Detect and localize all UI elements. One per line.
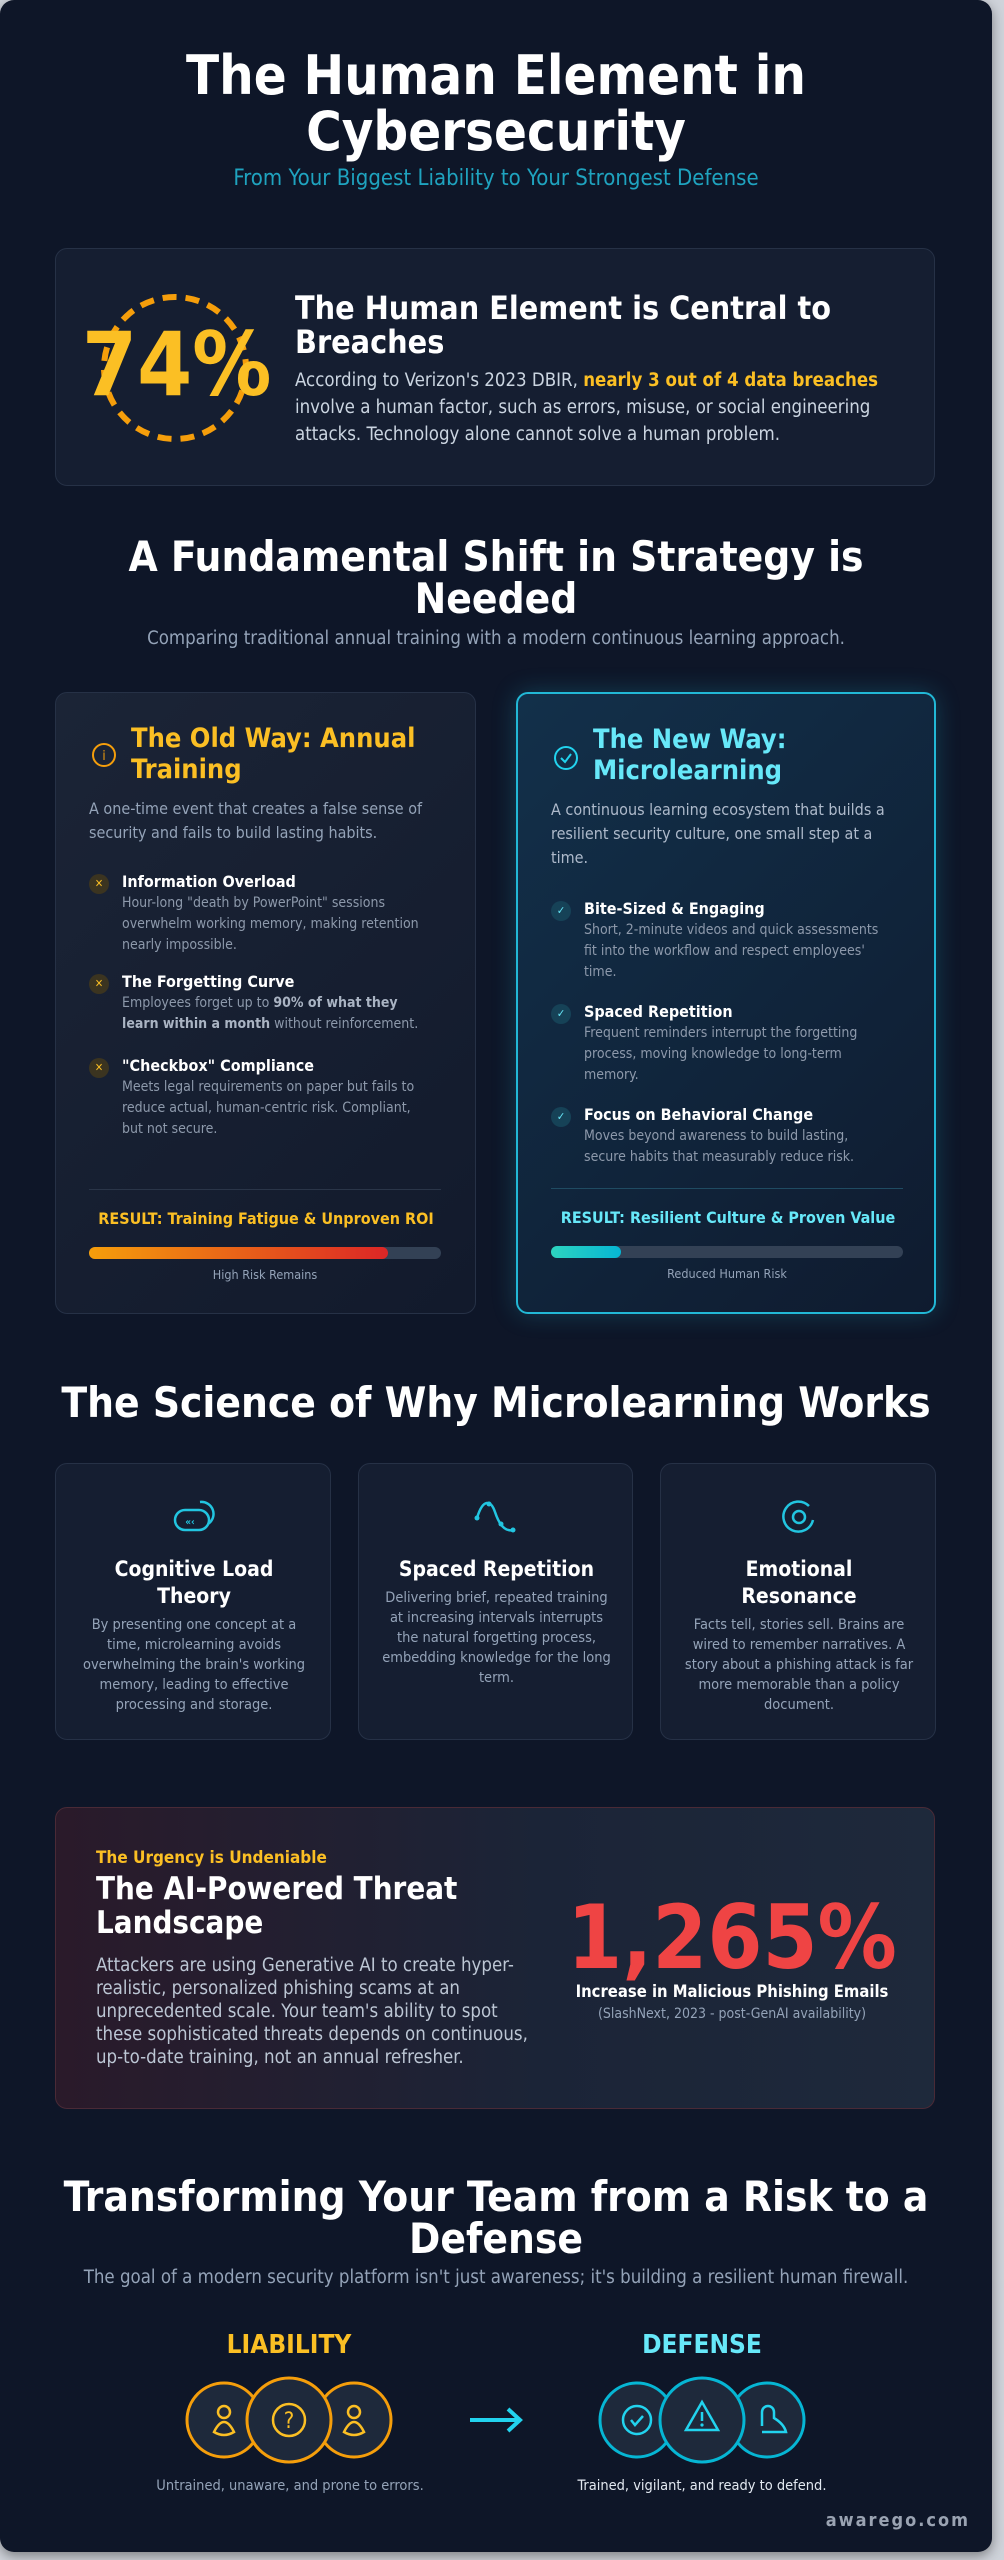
- heading: old way: The Old Way: Annual Training: [131, 723, 415, 785]
- card title: Theory: [157, 1584, 231, 1608]
- item: behavioral change: Focus on Behavioral Change: [584, 1105, 813, 1124]
- item: bite-sized: [551, 899, 878, 980]
- arrow: [470, 2408, 523, 2432]
- section heading: transforming: Transforming Your Team from a Risk to a Defense: [64, 2172, 928, 2263]
- item: forgetting curve: Employees forget up to 90% of what they learn within a month without reinforcement.: [122, 995, 418, 1032]
- item: spaced repetition: Frequent reminders interrupt the forgetting process, moving knowledge to long-term memory.: [584, 1025, 857, 1083]
- card text: Delivering brief, repeated training at increasing intervals interrupts the natural forgetting process, embedding knowledge for the long term.: [382, 1590, 611, 1686]
- item: forgetting curve: [89, 972, 418, 1032]
- bar caption: Reduced Human Risk: [667, 1266, 787, 1281]
- card title: [741, 1557, 857, 1608]
- section heading: science: The Science of Why Microlearning Works: [61, 1378, 931, 1427]
- panel: 74% stat: [55, 248, 935, 486]
- item: checkbox compliance: Meets legal requirements on paper but fails to reduce actual, human-centric risk. Compliant, but not secure.: [122, 1079, 414, 1137]
- stat source: (SlashNext, 2023 - post-GenAI availability): [598, 2006, 866, 2022]
- icon: curve: [474, 1502, 516, 1532]
- item: bite-sized: ✓: [557, 904, 565, 917]
- item: behavioral change: [551, 1105, 854, 1165]
- icon: info: [92, 743, 116, 767]
- caption: liability: Untrained, unaware, and prone to errors.: [156, 2478, 424, 2494]
- stat: 1,265%: 1,265%: [567, 1886, 897, 1989]
- item: behavioral change: ✓: [557, 1110, 565, 1123]
- item: forgetting curve: ✕: [95, 977, 103, 990]
- item: forgetting curve: The Forgetting Curve: [122, 972, 294, 991]
- icon: heart/ear: [782, 1500, 814, 1533]
- panel: old way: [55, 692, 476, 1314]
- item: information overload: Information Overload: [122, 872, 296, 891]
- panel: threat landscape: [55, 1807, 935, 2109]
- title: Cybersecurity: [306, 100, 686, 163]
- panel: spaced repetition: [358, 1463, 633, 1740]
- heading: new way: The New Way: Microlearning: [593, 724, 786, 786]
- icon: check circle: [554, 746, 578, 770]
- item: information overload: Hour-long "death by PowerPoint" sessions overwhelm working memory, making retention nearly impossible.: [122, 895, 419, 953]
- body text: Attackers are using Generative AI to create hyper-realistic, personalized phishing scams at an unprecedented scale. Your team's ability to spot these sophisticated threats depends on continuous, up-to-date training, not an annual refresher.: [96, 1955, 528, 2068]
- card text: By presenting one concept at a time, microlearning avoids overwhelming the brain's working memory, leading to effective processing and storage.: [83, 1617, 305, 1713]
- card title: Resonance: [741, 1584, 857, 1608]
- icon group: liability people: ?: [284, 2409, 294, 2434]
- stat caption: Increase in Malicious Phishing Emails: [576, 1982, 888, 2001]
- panel: cognitive load: [55, 1463, 331, 1740]
- item: spaced repetition: Spaced Repetition: [584, 1002, 733, 1021]
- icon group: liability people: [186, 2376, 392, 2464]
- result label: RESULT: Resilient Culture & Proven Value: [561, 1208, 895, 1227]
- item: bite-sized: Bite-Sized & Engaging: [584, 899, 765, 918]
- icon: brain: [174, 1500, 215, 1532]
- item: checkbox compliance: [89, 1056, 414, 1137]
- panel: emotional resonance: [660, 1463, 936, 1740]
- panel: new way: [516, 692, 936, 1314]
- description: A continuous learning ecosystem that builds a resilient security culture, one small step at a time.: [551, 800, 885, 867]
- card title: Spaced Repetition: [399, 1557, 594, 1581]
- bar: high risk: [89, 1247, 441, 1259]
- icon: brain: «‹: [185, 1517, 195, 1528]
- card title: [115, 1557, 273, 1608]
- result label: RESULT: Training Fatigue & Unproven ROI: [98, 1209, 434, 1228]
- label: liability: LIABILITY: [227, 2330, 351, 2360]
- icon: info: i: [102, 749, 106, 764]
- item: spaced repetition: [551, 1002, 857, 1083]
- stat body: According to Verizon's 2023 DBIR, nearly 3 out of 4 data breaches involve a human factor, such as errors, misuse, or social engineering attacks. Technology alone cannot solve a human problem.: [295, 370, 878, 445]
- icon group: defense: [598, 2376, 806, 2464]
- item: checkbox compliance: "Checkbox" Compliance: [122, 1056, 314, 1075]
- title: The Human Element in: [186, 44, 806, 107]
- stat number: 74%: [82, 313, 272, 416]
- brand footer: awarego.com: [826, 2510, 970, 2531]
- section heading: shift: A Fundamental Shift in Strategy is Needed: [128, 532, 864, 623]
- description: A one-time event that creates a false sense of security and fails to build lasting habits.: [89, 799, 422, 842]
- item: behavioral change: Moves beyond awareness to build lasting, secure habits that measurably reduce risk.: [584, 1128, 854, 1165]
- item: information overload: ✕: [95, 877, 103, 890]
- label: defense: DEFENSE: [642, 2330, 762, 2360]
- item: spaced repetition: ✓: [557, 1007, 565, 1020]
- card title: Emotional: [746, 1557, 852, 1581]
- item: bite-sized: Short, 2-minute videos and quick assessments fit into the workflow and respect employees' time.: [584, 922, 878, 980]
- stat heading: The Human Element is Central to Breaches: [295, 289, 831, 361]
- eyebrow: The Urgency is Undeniable: [96, 1848, 327, 1868]
- card title: Cognitive Load: [115, 1557, 273, 1581]
- item: information overload: [89, 872, 419, 953]
- heading: The AI-Powered Threat Landscape: [96, 1871, 457, 1941]
- icon: dashed circle: [101, 294, 249, 442]
- title: [186, 44, 806, 163]
- section subtitle: Comparing traditional annual training with a modern continuous learning approach.: [147, 628, 845, 649]
- subtitle: From Your Biggest Liability to Your Strongest Defense: [233, 166, 759, 191]
- bar caption: High Risk Remains: [213, 1267, 317, 1282]
- caption: defense: Trained, vigilant, and ready to defend.: [578, 2478, 826, 2494]
- section subtitle: The goal of a modern security platform isn't just awareness; it's building a resilient human firewall.: [84, 2267, 908, 2288]
- card text: Facts tell, stories sell. Brains are wired to remember narratives. A story about a phishing attack is far more memorable than a policy document.: [685, 1617, 913, 1713]
- bar: reduced risk: [551, 1246, 903, 1258]
- item: checkbox compliance: ✕: [95, 1061, 103, 1074]
